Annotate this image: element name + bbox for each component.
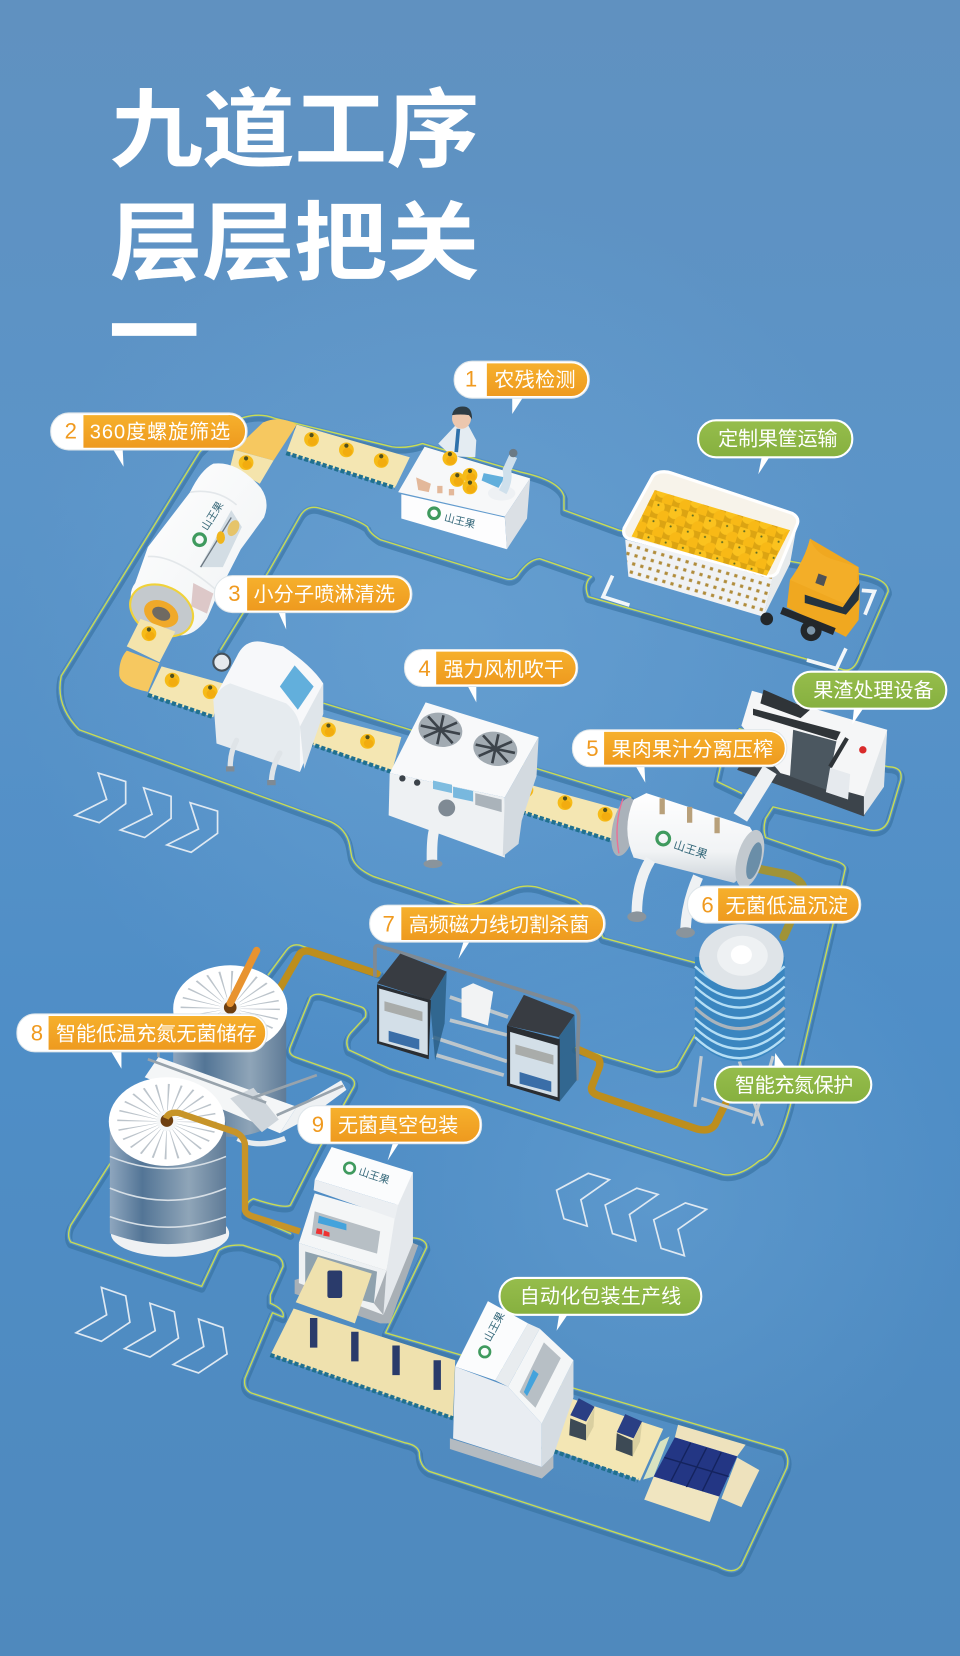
chevrons lower left	[76, 1287, 227, 1373]
machine 10: packaging machine	[450, 1301, 573, 1479]
carton of finished boxes	[643, 1425, 759, 1522]
callout 8: 8	[31, 1020, 43, 1045]
callout 1	[454, 361, 589, 414]
truck cab	[760, 539, 860, 641]
conveyor: bottom belt with bottles	[270, 1309, 455, 1418]
machine 3: spray cleaner	[213, 641, 323, 783]
conveyor: right belt with boxes	[542, 1398, 663, 1481]
callout 4: 强力风机吹干	[444, 658, 564, 681]
machine 5: press cylinder: 山王果	[672, 839, 709, 862]
machine 2: spiral drum: 山王果	[199, 499, 227, 533]
callout: pomace equipment	[793, 672, 946, 725]
machine 4: fan dryer	[389, 702, 539, 868]
callout 7: 高频磁力线切割杀菌	[409, 913, 589, 936]
callout: custom crate transport: 定制果筐运输	[718, 428, 837, 451]
callout 2	[51, 413, 247, 467]
storage tank front	[109, 1077, 300, 1257]
callout 8: 智能低温充氮无菌储存	[56, 1022, 257, 1045]
callout: nitrogen protection: 智能充氮保护	[735, 1074, 853, 1097]
microscope	[482, 449, 517, 501]
machine 2: spiral drum	[122, 463, 267, 646]
callout 9: 无菌真空包装	[338, 1114, 458, 1137]
machine 6: settling tank	[695, 924, 785, 1126]
orange juice pipe	[750, 867, 804, 937]
callout 7	[370, 905, 605, 959]
callout 6	[688, 886, 861, 923]
glassware	[416, 477, 454, 495]
callout 4: 4	[418, 656, 431, 681]
callout 6: 6	[701, 892, 714, 917]
parking marks	[603, 576, 874, 669]
callout: automated packing line: 自动化包装生产线	[520, 1285, 681, 1308]
callout 1: 农残检测	[494, 369, 576, 392]
scientist figure	[438, 407, 476, 457]
machine 1: inspection bench	[398, 407, 530, 549]
conveyor: belt to press	[514, 780, 619, 841]
callout 8	[17, 1014, 267, 1069]
callout 6: 无菌低温沉淀	[726, 894, 848, 917]
callout: nitrogen protection	[715, 1053, 871, 1103]
chevrons lower right	[557, 1173, 707, 1256]
machine 9: vacuum packer	[295, 1147, 418, 1323]
callout 1: 1	[465, 367, 477, 392]
callout 9: 9	[312, 1112, 324, 1137]
title: 九道工序	[110, 82, 479, 178]
conveyor: top belt with corner	[230, 419, 410, 488]
pipe from steriliser to settling tank	[280, 951, 726, 1130]
machine 1: inspection bench: 山王果	[443, 512, 477, 531]
callout 5	[572, 730, 787, 783]
callout 3: 3	[228, 581, 241, 606]
machine 9: vacuum packer: 山王果	[357, 1166, 391, 1187]
callout 5: 果肉果汁分离压榨	[611, 738, 773, 761]
callout 5: 5	[586, 736, 599, 761]
title underline bar	[112, 323, 196, 336]
callout 9	[298, 1106, 482, 1161]
callout 3: 小分子喷淋清洗	[253, 583, 395, 606]
callout 7: 7	[382, 911, 395, 936]
conveyor: middle belt	[303, 714, 401, 772]
callout 2: 360度螺旋筛选	[90, 420, 230, 443]
platform and stairs	[145, 1049, 346, 1144]
callout: automated packing line	[500, 1278, 701, 1331]
conveyor: lower left belt with corner	[119, 619, 223, 717]
callout 3	[214, 576, 412, 629]
truck and fruit crate	[603, 472, 874, 669]
machine 5: press cylinder	[607, 770, 770, 938]
callout 4	[404, 650, 578, 702]
machine 10: packaging machine: 山王果	[482, 1310, 508, 1344]
machine 7: magnetic steriliser	[375, 946, 579, 1102]
fruit samples	[443, 451, 477, 494]
callout: custom crate transport	[698, 420, 852, 474]
callout 2: 2	[65, 418, 77, 443]
title	[110, 82, 479, 291]
platform outlines	[60, 415, 901, 1573]
title: 层层把关	[110, 195, 479, 291]
chevrons upper left	[75, 773, 218, 852]
storage tank rear	[173, 951, 287, 1137]
callout: pomace equipment: 果渣处理设备	[813, 679, 934, 702]
machine: pomace processor	[737, 690, 887, 816]
